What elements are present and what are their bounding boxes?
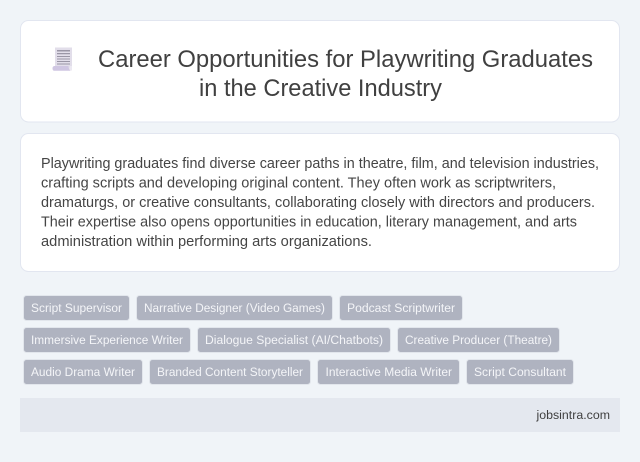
tag: Narrative Designer	[136, 296, 332, 320]
tag: Audio Drama Writer	[24, 360, 142, 384]
tag: Creative Producer: Creative Producer (Theatre)	[405, 333, 552, 347]
tag: Podcast Scriptwriter: Podcast Scriptwriter	[347, 301, 455, 315]
tag: Immersive Experience Writer: Immersive Experience Writer	[31, 333, 183, 347]
title: Career Opportunities for Playwriting Graduates	[98, 46, 593, 73]
description text: Their expertise also opens opportunities in education, literary management, and arts	[41, 214, 577, 230]
title	[98, 46, 593, 102]
tag: Creative Producer	[398, 328, 560, 352]
description text: Playwriting graduates find diverse career paths in theatre, film, and television industries,	[41, 156, 599, 172]
tag: Script Supervisor	[24, 296, 130, 320]
description text	[41, 156, 599, 250]
tag: Branded Content Storyteller	[150, 360, 310, 384]
tag: Script Supervisor: Script Supervisor	[31, 301, 122, 315]
tag: Interactive Media Writer	[318, 360, 460, 384]
tag: Script Consultant: Script Consultant	[474, 365, 567, 379]
title: in the Creative Industry	[199, 75, 443, 102]
panel: description card	[20, 134, 620, 272]
description text: administration within performing arts organizations.	[41, 234, 372, 250]
description text: crafting scripts and developing original content. They often work as scriptwriters,	[41, 176, 556, 192]
panel: header card	[20, 20, 620, 122]
tag: Podcast Scriptwriter	[340, 296, 462, 320]
tag: Script Consultant	[466, 360, 574, 384]
tag: Interactive Media Writer: Interactive Media Writer	[326, 365, 452, 379]
tag: Dialogue Specialist	[198, 328, 390, 352]
tag list	[24, 296, 574, 384]
tag: Branded Content Storyteller: Branded Content Storyteller	[157, 365, 303, 379]
tag: Immersive Experience Writer	[24, 328, 190, 352]
tag: Audio Drama Writer: Audio Drama Writer	[31, 365, 135, 379]
tag: Narrative Designer: Narrative Designer (Video Games)	[144, 301, 325, 315]
footer bar	[20, 398, 620, 432]
icon: script scroll	[52, 48, 72, 71]
description text: dramaturgs, or creative consultants, collaborating closely with directors and producers.	[41, 195, 595, 211]
footer source: jobsintra.com	[535, 408, 610, 422]
tag: Dialogue Specialist: Dialogue Specialist (AI/Chatbots)	[205, 333, 383, 347]
